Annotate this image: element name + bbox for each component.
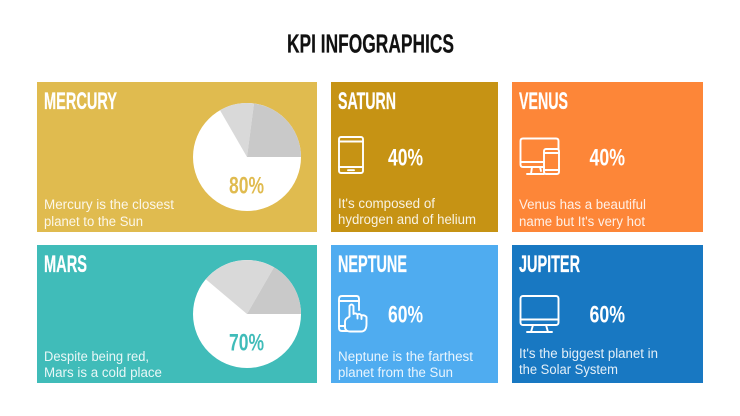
- heading: jupiter: JUPITER: [519, 251, 580, 278]
- value: saturn 40%: 40%: [388, 144, 423, 172]
- pie chart: mars 70%: [193, 260, 301, 368]
- text: jupiter description: [519, 346, 658, 377]
- text: jupiter description: It's the biggest planet in: [519, 346, 658, 361]
- pie chart: mars 70%: 70%: [229, 330, 264, 356]
- value: neptune 60%: 60%: [388, 302, 423, 328]
- panel: saturn: [331, 82, 498, 232]
- panel: mercury: [37, 82, 317, 232]
- pie chart: mercury 80%: [193, 103, 301, 211]
- icon: monitor: [520, 296, 558, 332]
- text: saturn description: hydrogen and of helium: [338, 212, 476, 227]
- text: neptune description: planet from the Sun: [338, 365, 453, 380]
- icon: monitor and phone: [520, 138, 559, 174]
- text: mars description: [44, 349, 162, 380]
- panel: mars: [37, 245, 317, 383]
- text: venus description: name but It's very hot: [519, 214, 645, 229]
- panel: neptune: [331, 245, 498, 383]
- text: mars description: Mars is a cold place: [44, 365, 162, 380]
- text: mercury description: [44, 197, 174, 229]
- text: neptune description: [338, 349, 473, 380]
- text: venus description: Venus has a beautiful: [519, 197, 646, 212]
- text: mars description: Despite being red,: [44, 349, 149, 364]
- value: venus 40%: 40%: [590, 144, 625, 172]
- pie chart: mercury 80%: 80%: [229, 172, 264, 200]
- title: KPI INFOGRAPHICS: [287, 30, 454, 58]
- panel: venus: [512, 82, 703, 232]
- heading: mercury: MERCURY: [44, 88, 117, 115]
- text: mercury description: Mercury is the closest: [44, 197, 174, 212]
- heading: neptune: NEPTUNE: [338, 251, 407, 278]
- text: venus description: [519, 197, 646, 229]
- text: neptune description: Neptune is the farthest: [338, 349, 473, 364]
- heading: saturn: SATURN: [338, 88, 396, 115]
- icon: phone with pointing hand: [339, 296, 366, 332]
- text: mercury description: planet to the Sun: [44, 214, 143, 229]
- value: jupiter 60%: 60%: [590, 302, 625, 328]
- panel: jupiter: [512, 245, 703, 383]
- heading: venus: VENUS: [519, 88, 568, 115]
- icon: tablet: [339, 137, 363, 173]
- heading: mars: MARS: [44, 251, 87, 278]
- text: saturn description: [338, 196, 476, 227]
- text: jupiter description: the Solar System: [519, 362, 618, 377]
- text: saturn description: It's composed of: [338, 196, 435, 211]
